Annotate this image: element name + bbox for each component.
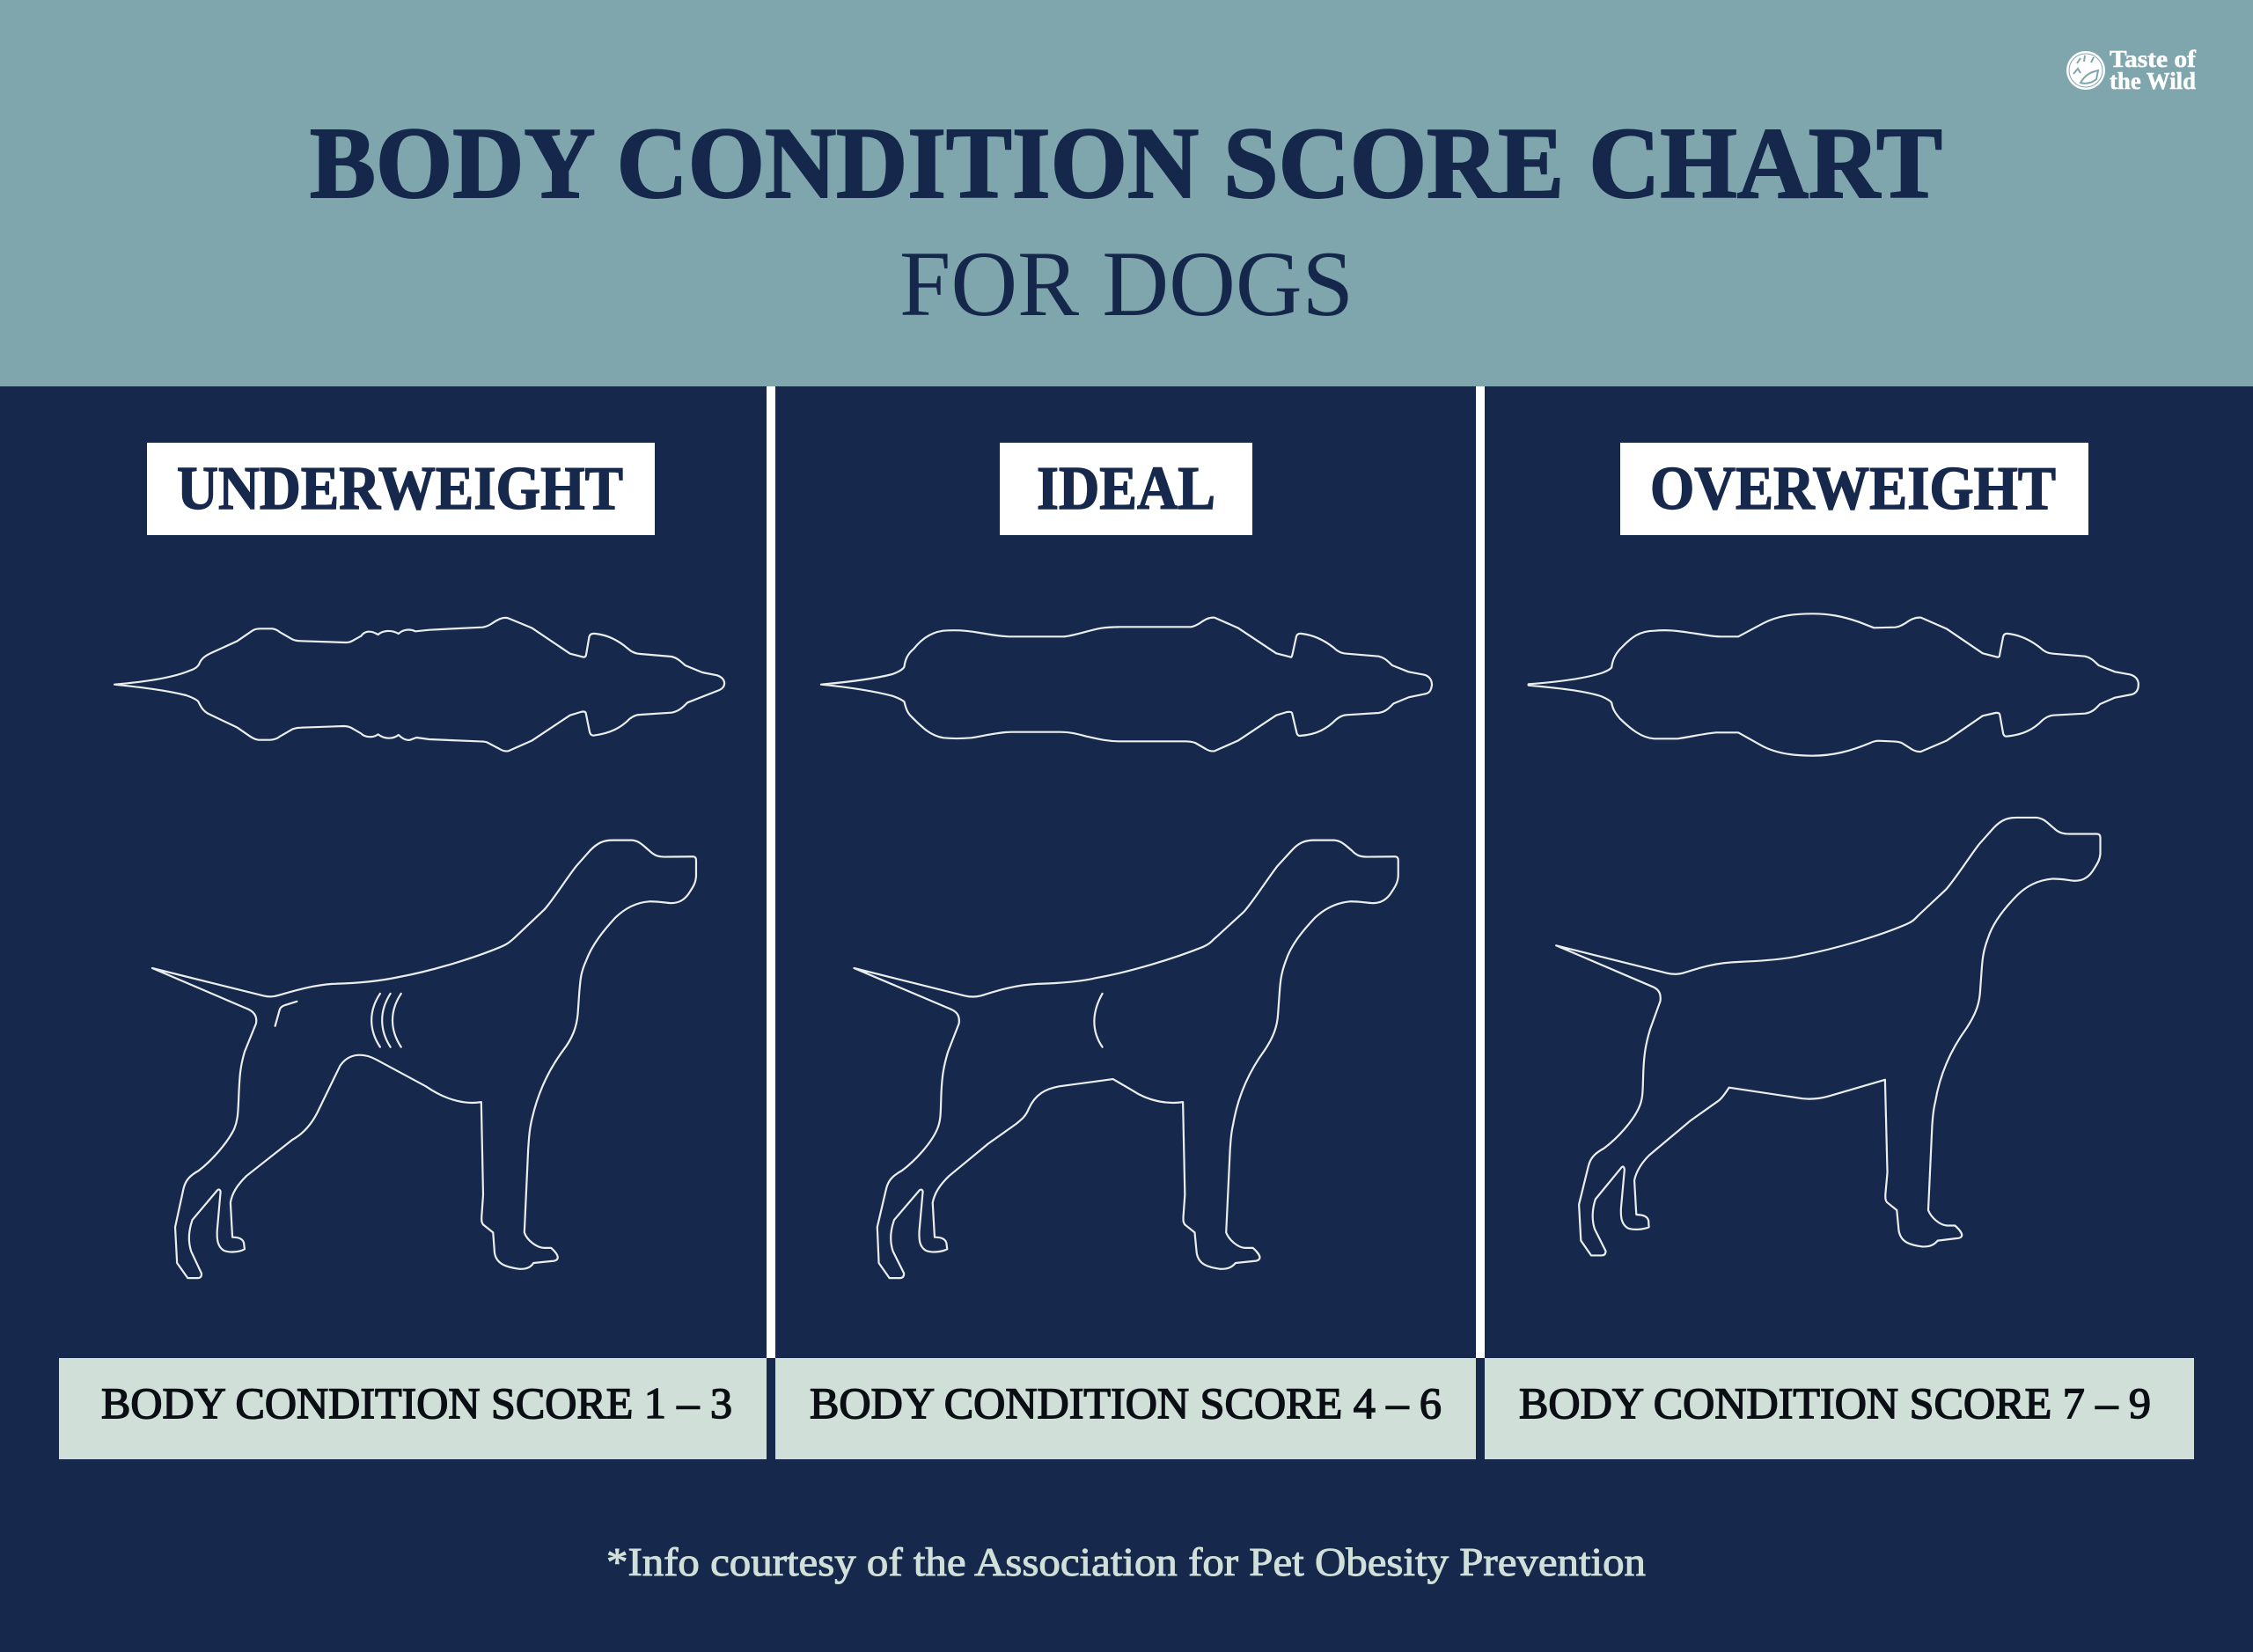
panel: ideal — [775, 443, 1476, 1459]
score bar 7-9 — [1485, 1358, 2194, 1459]
heading: underweight — [147, 443, 655, 535]
heading: overweight: OVERWEIGHT — [1650, 455, 2056, 523]
icon: overweight dog side view — [1556, 818, 2101, 1255]
icon: overweight dog top view — [1529, 613, 2139, 756]
icon: ideal dog top view — [821, 618, 1432, 751]
column dividers — [767, 386, 1485, 1358]
subtitle: FOR DOGS — [899, 232, 1354, 335]
panel: overweight — [1485, 443, 2194, 1459]
score bar 1-3: BODY CONDITION SCORE 1 – 3 — [101, 1378, 732, 1428]
header panel — [0, 0, 2253, 386]
score bar 4-6 — [775, 1358, 1476, 1459]
heading: underweight: UNDERWEIGHT — [177, 455, 623, 523]
title: BODY CONDITION SCORE CHART — [310, 107, 1942, 219]
panel: underweight — [59, 443, 767, 1459]
logo: Taste of the Wild: the Wild — [2110, 68, 2196, 94]
heading: ideal — [1000, 443, 1252, 535]
score bar 4-6: BODY CONDITION SCORE 4 – 6 — [810, 1378, 1442, 1428]
score bar 1-3 — [59, 1358, 767, 1459]
heading: overweight — [1620, 443, 2088, 535]
icon: underweight dog top view — [114, 618, 724, 751]
score bar 7-9: BODY CONDITION SCORE 7 – 9 — [1519, 1378, 2151, 1428]
logo: Taste of the Wild: Taste of — [2110, 46, 2197, 72]
logo: Taste of the Wild — [2066, 46, 2197, 94]
icon: ideal dog side view — [854, 841, 1398, 1278]
footnote: *Info courtesy of the Association for Pet Obesity Prevention — [606, 1540, 1646, 1584]
icon: underweight dog side view — [152, 841, 696, 1278]
heading: ideal: IDEAL — [1037, 455, 1215, 523]
